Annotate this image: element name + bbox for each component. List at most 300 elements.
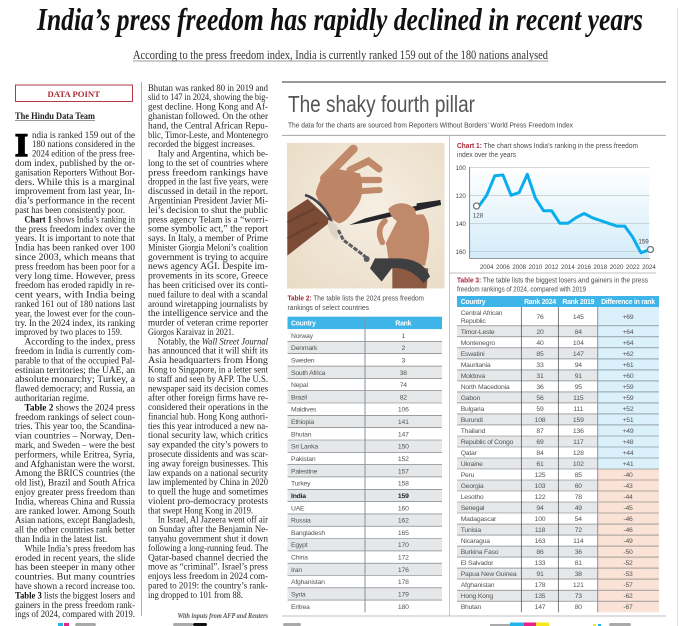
chart 1 caption	[457, 141, 638, 159]
article column 1: try. In the 2024 index, its ranking	[15, 318, 135, 328]
end marker	[638, 238, 654, 252]
right cuff	[370, 258, 430, 283]
table 2 rows: Iran	[291, 567, 302, 574]
article column 1: has been steeper in many other	[15, 562, 135, 572]
table 3 rows: Moldova	[461, 373, 485, 380]
article column 1: flawed democracy; and Russia, an	[15, 384, 135, 394]
article column 1: absolute monarchy; Turkey, a	[15, 374, 135, 384]
article column 1: old list), Brazil and South Africa	[15, 478, 135, 488]
table 3 caption	[457, 276, 648, 294]
article column 1: authoritarian regime.	[15, 393, 89, 403]
line chart: India's rank 2003 to 2024	[456, 165, 656, 271]
table 2 rows: Bangladesh	[291, 530, 325, 537]
table 3 rows: Ukraine	[461, 461, 483, 468]
x axis labels: 2024	[642, 264, 656, 271]
table 3 header: Rank 2019	[562, 299, 595, 306]
table 2 rows: 178	[398, 579, 409, 586]
table 2 rows: Maldives	[291, 407, 317, 414]
table 3 rows: 114	[573, 538, 584, 545]
table 3 rows: 136	[573, 428, 584, 435]
article column 2: ghanistan followed. On the other	[148, 111, 268, 121]
table 3 rows: 76	[536, 314, 544, 321]
table 2 rows: Nepal	[291, 382, 308, 389]
article column 1: than India in the latest list.	[15, 534, 107, 544]
article column 1: ings of 2024, compared with 2019.	[15, 609, 135, 619]
article column 2: has been criticised over its conti-	[148, 280, 268, 290]
table 3 rows: 78	[575, 494, 582, 501]
table 3 rows: -49	[623, 538, 633, 545]
article column 1: freedom in India is currently com-	[15, 346, 135, 356]
table 3 rows: 163	[535, 538, 546, 545]
table 3 rows: 80	[575, 604, 582, 611]
table 2 header	[288, 317, 442, 329]
article column 2: government is trying to acquire	[148, 252, 268, 262]
table 3 rows: North Macedonia	[461, 384, 510, 391]
table 3 rows: Gabon	[461, 395, 481, 402]
table 3 rows: Central African	[461, 310, 503, 317]
table 2 caption	[288, 294, 424, 312]
table 2 rows: 172	[398, 555, 409, 562]
table 3 rows: 111	[573, 406, 584, 413]
article column 1: While India’s press freedom has	[24, 543, 135, 553]
table 2 rows: Norway	[291, 333, 314, 340]
table 3 rows: 100	[535, 516, 546, 523]
table 3 caption: Table 3: The table lists the biggest losers and gainers in the press	[457, 276, 648, 285]
table 2 rows: 165	[398, 530, 409, 537]
table 2 rows: Pakistan	[291, 456, 316, 463]
article column 1: ders. While this is a marginal	[15, 177, 135, 187]
article column 1: years. It is important to note that	[15, 233, 135, 243]
table 3 rows: -45	[623, 505, 633, 512]
table 3 rows: 85	[575, 472, 582, 479]
article column 2: murder of veteran crime reporter	[148, 318, 268, 328]
x axis labels: 2010	[529, 264, 543, 271]
y axis labels: 120	[456, 193, 466, 200]
article column 2: nued failure to deal with a scandal	[148, 289, 268, 299]
article column 1: are ranked lower. Among South	[15, 506, 135, 516]
table 3 rows: El Salvador	[461, 560, 494, 567]
byline: The Hindu Data Team	[15, 112, 95, 122]
table 3 rows: +60	[623, 373, 634, 380]
table 3 rows: 87	[536, 428, 544, 435]
end marker: 159	[638, 238, 649, 246]
article column 2: blic, Timor-Leste, and Montenegro	[148, 130, 268, 140]
table 2 rows: Russia	[291, 518, 311, 525]
print registration marks	[58, 622, 631, 626]
table 2 rows: 170	[398, 542, 409, 549]
table 3 rows: Qatar	[461, 450, 478, 457]
table 3 rows: -46	[623, 516, 633, 523]
table 2 rows: Eritrea	[291, 604, 310, 611]
article column 1: 2024 edition of the press free-	[32, 149, 135, 159]
table 3 rows: 36	[575, 549, 582, 556]
right hand	[386, 214, 429, 266]
article column 2: newspaper said its decision comes	[148, 383, 268, 393]
drop cap: I	[15, 128, 28, 164]
table 3 rows: 85	[536, 351, 544, 358]
table 3 rows: Bhutan	[461, 604, 481, 611]
table 3 rows: -43	[623, 483, 633, 490]
table 3 rows: 69	[536, 439, 544, 446]
table 3 rows: +49	[623, 428, 634, 435]
article column 2: violent pro-democracy protests	[148, 496, 268, 506]
article column 2: lei’s decision to shut the public	[148, 205, 268, 215]
table 2 rows: UAE	[291, 505, 305, 512]
table 3 rows: 135	[535, 593, 546, 600]
table 3 rows: Bulgaria	[461, 406, 484, 413]
article column 1: eroded in recent years, the slide	[15, 553, 135, 563]
y axis labels: 140	[456, 221, 466, 228]
table 3 rows: -50	[623, 549, 633, 556]
panel heading: the shaky fourth pillar: The shaky fourth pillar	[288, 91, 475, 117]
article column 2: the intelligence service and the	[148, 308, 268, 318]
article column 2: around wiretapping journalists by	[148, 299, 268, 309]
article column 1: cent years, with India being	[15, 290, 135, 300]
pen	[349, 200, 441, 225]
table 2 header: Country	[291, 320, 316, 327]
article column 2: some symbolic act,” the report	[148, 224, 268, 234]
table 3 rows: 118	[535, 527, 546, 534]
article column 1: gainers in the press freedom rank-	[15, 600, 135, 610]
article column 1: enjoy greater press freedom than	[15, 487, 135, 497]
article column 2: following a long-running feud. The	[148, 543, 268, 553]
panel subheading: The data for the charts are sourced from Reporters Without Borders’ World Press Freedom Index	[288, 122, 573, 129]
table 3 rows: +44	[623, 450, 634, 457]
article column 1: ganisation Reporters Without Bor-	[15, 167, 135, 177]
left cuff	[305, 195, 332, 222]
article column 2: ties this year introduced a new na-	[148, 421, 268, 431]
table 2: press freedom rankings of select countries	[288, 317, 442, 612]
chart 1 caption: index over the years	[457, 150, 516, 159]
table 3 rows: 147	[573, 351, 584, 358]
article column 1: dia’s performance in the recent	[15, 196, 135, 206]
article column 1: countries. But many countries	[15, 572, 135, 582]
table 3 caption: freedom rankings of 2024, compared with 2019	[457, 284, 586, 294]
article column 2: ing away foreign businesses. This	[148, 458, 268, 468]
article column 2: Qatar-based channel decried the	[148, 552, 268, 562]
table 3 rows: 91	[575, 373, 582, 380]
table 3 rows: 147	[535, 604, 546, 611]
table 3 rows: +59	[623, 395, 634, 402]
table 3 rows: 94	[575, 362, 582, 369]
table 3 rows: -46	[623, 527, 633, 534]
article column 1: improvement from last year, In-	[15, 186, 135, 196]
panel: data point label: DATA POINT	[48, 89, 100, 99]
article column 1: estinian territories; the UAE, an	[15, 365, 135, 375]
article column 1: have shown a record increase too.	[15, 581, 135, 591]
table 3 rows: Tunisia	[461, 527, 481, 534]
article column 1: all the other countries rank better	[15, 525, 135, 535]
article column 2: recorded the biggest increases.	[148, 139, 255, 149]
article column 1: ranked 161 out of 180 nations last	[15, 299, 135, 309]
table 3 rows: 121	[573, 582, 584, 589]
article column 2: Giorgos Karaivaz in 2021.	[148, 327, 234, 337]
y axis labels: 160	[456, 249, 466, 256]
table 3 rows: 73	[575, 593, 582, 600]
article column 2: In Israel, Al Jazeera went off air	[158, 515, 268, 525]
article column 2: news agency AGI. Despite im-	[148, 261, 268, 271]
table 3 rows: 122	[535, 494, 546, 501]
table 2 rows: 147	[398, 431, 409, 438]
table 2 rows: South Africa	[291, 370, 326, 377]
table 2 rows: 2	[402, 345, 406, 352]
table 3 rows: Republic of Congo	[461, 439, 514, 446]
table 3 rows: +64	[623, 340, 634, 347]
table 3 rows: 84	[575, 329, 582, 336]
table 3 rows: Afghanistan	[461, 582, 495, 589]
table 2 rows: Denmark	[291, 345, 318, 352]
table 3 rows: 104	[573, 340, 584, 347]
table 3 header: Country	[461, 299, 486, 306]
article column 1: vian countries – Norway, Den-	[15, 431, 135, 441]
table 2 rows: Sri Lanka	[291, 444, 318, 451]
table 2 rows: 82	[400, 394, 407, 401]
table 3 rows: Hong Kong	[461, 593, 493, 600]
article column 2: on Sunday after the Benjamin Ne-	[148, 524, 268, 534]
table 3 rows: Thailand	[461, 428, 486, 435]
article column 1: freedom has eroded rapidly in re-	[15, 280, 135, 290]
table 3 rows: -40	[623, 472, 633, 479]
article column 1: freedom rankings of select coun-	[15, 412, 135, 422]
x axis labels: 2004	[480, 264, 494, 271]
x axis labels: 2016	[577, 264, 592, 271]
table 3 rows: Mauritania	[461, 362, 491, 369]
table 3 rows: -67	[623, 604, 633, 611]
x axis labels: 2018	[593, 264, 608, 271]
table 3 rows: Burundi	[461, 417, 483, 424]
table 3: biggest losers and gainers	[457, 296, 659, 612]
table 3 rows: -44	[623, 494, 633, 501]
article column 1: press freedom has been poor for a	[15, 261, 135, 271]
panel: data point label	[16, 85, 132, 102]
article column 1: parable to that of the occupied Pal-	[15, 355, 135, 365]
table 3 rows: -52	[623, 560, 633, 567]
article column 1: improved by two places to 159.	[15, 327, 122, 337]
article column 2: law implemented by China in 2020	[148, 477, 268, 487]
article column 2: dropped in the last five years, were	[148, 177, 268, 187]
table 3 rows: +41	[623, 461, 634, 468]
article column 2: that swept Hong Kong in 2019.	[148, 505, 253, 515]
article column 1: mark, and Sweden – were the best	[15, 440, 135, 450]
article column 2: gest decline. Hong Kong and Af-	[148, 102, 268, 112]
article column 2: press freedom rankings have	[148, 167, 268, 177]
article column 2: to staff and seen by AFP. The U.S.	[148, 374, 268, 384]
article column 1: year, the lowest ever for the coun-	[15, 308, 135, 318]
table 3 rows: Timor-Leste	[461, 329, 495, 336]
table 2 rows: Egypt	[291, 542, 308, 549]
table 3 rows: Papua New Guinea	[461, 571, 517, 578]
table 2 rows: 38	[400, 370, 407, 377]
table 3 header: Rank 2024	[524, 299, 556, 306]
article column 1: very long time. However, press	[15, 271, 135, 281]
table 3 rows: 60	[575, 483, 582, 490]
table 3 rows: -53	[623, 571, 633, 578]
article column 2: tional security law, which critics	[148, 430, 268, 440]
table 2 rows: 180	[398, 604, 409, 611]
table 3 rows: 72	[575, 527, 582, 534]
article column 2: enjoys less freedom in 2024 com-	[148, 571, 268, 581]
start marker: 128	[473, 212, 484, 220]
table 3 rows: +69	[623, 314, 634, 321]
article column 1: 180 nations considered in the	[32, 139, 135, 149]
table 3 rows: 33	[536, 362, 544, 369]
difference column: losers	[598, 469, 659, 612]
table 2 rows: Syria	[291, 592, 306, 598]
article column 2: Asia headquarters from Hong	[148, 355, 268, 365]
article column 1: Table 3 lists the biggest losers and	[15, 590, 135, 600]
table 2 rows: Bhutan	[291, 431, 312, 438]
article column 2: to quell the huge and sometimes	[148, 486, 268, 496]
table 2 rows: 179	[398, 592, 409, 598]
table 3 rows: Montenegro	[461, 340, 495, 347]
table 3 rows: Senegal	[461, 505, 485, 512]
x axis labels: 2020	[610, 264, 624, 271]
table 3 rows: 103	[535, 483, 546, 490]
x axis labels: 2006	[496, 264, 510, 271]
table 3 rows: 94	[536, 505, 544, 512]
article column 2: say expanded the city’s powers to	[148, 440, 268, 450]
table 2 rows: 159	[398, 493, 409, 500]
y axis labels: 100	[456, 165, 466, 172]
article column 2: Kong to Singapore, in a letter sent	[148, 364, 268, 374]
article column 2: Italy and Argentina, which be-	[158, 148, 268, 158]
table 3 rows: 31	[536, 373, 544, 380]
article column 2: law expands on a national security	[148, 468, 268, 478]
table 2 rows: Sweden	[291, 357, 315, 364]
x axis labels	[480, 264, 656, 271]
table 3 rows: Nicaragua	[461, 538, 490, 545]
article column 2: Bhutan was ranked 80 in 2019 and	[148, 83, 268, 93]
article column 2: considered their operations in the	[148, 402, 268, 412]
article column 2: prosecute dissidents and was scar-	[148, 449, 268, 459]
table 3 rows: 36	[536, 384, 544, 391]
table 2 rows	[288, 317, 442, 612]
x axis labels: 2014	[561, 264, 575, 271]
table 3 rows: 159	[573, 417, 584, 424]
article column 2	[148, 83, 268, 600]
chart 1 caption: Chart 1: The chart shows India’s ranking in the press freedom	[457, 141, 638, 150]
article column 2: Argentinian President Javier Mi-	[148, 196, 268, 206]
table 3 header: Difference in rank	[601, 299, 655, 306]
table 2 rows: Turkey	[291, 481, 311, 488]
table 2 rows: Afghanistan	[291, 579, 325, 586]
table 2 header: Rank	[395, 320, 412, 327]
table 3 rows: +59	[623, 384, 634, 391]
table 2 rows: Palestine	[291, 468, 318, 475]
table 2 rows: 158	[398, 481, 409, 488]
article column 1: According to the index, press	[24, 337, 135, 347]
table 2 rows: 152	[398, 456, 409, 463]
x axis labels: 2008	[512, 264, 527, 271]
photo: handcuffed hands holding a pen	[287, 143, 444, 288]
table 3 rows: 108	[535, 417, 546, 424]
table 3 rows: 117	[573, 439, 584, 446]
table 2 rows: China	[291, 555, 308, 562]
article column 2: after other foreign firms have re-	[148, 393, 268, 403]
left forearm	[287, 199, 332, 256]
article column 1: India, whereas China and Russia	[15, 496, 135, 506]
article column 1: Chart 1 shows India’s ranking in	[24, 214, 135, 224]
article column 1: India has been ranked over 100	[15, 243, 135, 253]
table 3 header	[457, 296, 659, 307]
article column 2: press agency Telam is a “worri-	[148, 214, 268, 224]
article column 1: since 2003, which means that	[15, 252, 135, 262]
article column 2: ing dropped to 101 from 88.	[148, 590, 243, 600]
table 2 rows: 162	[398, 518, 409, 525]
table 3 rows: +52	[623, 406, 634, 413]
table 2 rows: 176	[398, 567, 409, 574]
article column 1: the press freedom index over the	[15, 224, 135, 234]
table 3 rows: 40	[536, 340, 544, 347]
article column 1	[15, 128, 135, 619]
subtitle: According to the press freedom index, India is currently ranked 159 out of the 180 nations analysed	[133, 48, 549, 62]
rank line	[479, 174, 649, 253]
table 3 rows: 56	[536, 395, 544, 402]
table 3 rows	[457, 307, 659, 612]
table 3 rows: Eswatini	[461, 351, 485, 358]
article column 2: Minister Giorgia Meloni’s coalition	[148, 242, 268, 252]
chain	[338, 230, 368, 259]
table 3 rows: 59	[536, 406, 544, 413]
table 3 rows: -62	[623, 593, 633, 600]
upper hand	[324, 149, 380, 192]
table 3 rows: Republic	[461, 318, 486, 325]
article column 2: has announced that it will shift its	[148, 346, 268, 356]
table 3 rows: 125	[535, 472, 546, 479]
article column 1: past has been consistently poor.	[15, 205, 125, 215]
article column 1: and Afghanistan were the worst.	[15, 459, 135, 469]
table 3 rows: -57	[623, 582, 633, 589]
table 3 rows: 178	[535, 582, 546, 589]
table 3 rows: Burkina Faso	[461, 549, 499, 556]
article column 2: pared to 2019: the country’s rank-	[148, 580, 268, 590]
table 3 rows: +61	[623, 362, 634, 369]
x axis labels: 2012	[545, 264, 559, 271]
table 3 rows: 54	[575, 516, 582, 523]
x axis labels: 2022	[626, 264, 640, 271]
difference column: gainers	[598, 307, 659, 469]
table 3 rows: 49	[575, 505, 582, 512]
table 3 rows: Madagascar	[461, 516, 497, 523]
table 2 rows: Brazil	[291, 394, 307, 401]
table 3 rows: Lesotho	[461, 494, 484, 501]
article column 1: ndia is ranked 159 out of the	[32, 130, 135, 140]
table 3 rows: Peru	[461, 472, 475, 479]
article column 2: slid to 147 in 2024, showing the big-	[148, 92, 268, 102]
table 3 rows: 128	[573, 450, 584, 457]
article column 2: Notably, the Wall Street Journal	[158, 336, 268, 346]
table 2 rows: 3	[402, 357, 406, 364]
article column 2: hand, the Central African Repu-	[148, 120, 268, 130]
article column 2: provements in its score, Greece	[148, 271, 268, 281]
table 2 rows: 150	[398, 444, 409, 451]
table 3 rows: +51	[623, 417, 634, 424]
table 2 caption: Table 2: The table lists the 2024 press freedom	[288, 294, 424, 303]
article column 2: financial hub. Hong Kong authori-	[148, 411, 268, 421]
table 2 rows: 141	[398, 419, 409, 426]
table 3 rows: +48	[623, 439, 634, 446]
table 3 rows: 145	[573, 314, 584, 321]
table 2 caption: rankings of select countries	[288, 303, 369, 312]
table 2 rows: 160	[398, 505, 409, 512]
table 3 rows: 115	[573, 395, 584, 402]
table 2 rows: 74	[400, 382, 407, 389]
table 2 rows: Ethiopia	[291, 419, 314, 426]
credit line: With inputs from AFP and Reuters	[178, 611, 268, 620]
article column 2: move as “criminal”. Israel’s press	[148, 562, 268, 572]
area fill	[470, 167, 649, 258]
table 3 rows: 133	[535, 560, 546, 567]
